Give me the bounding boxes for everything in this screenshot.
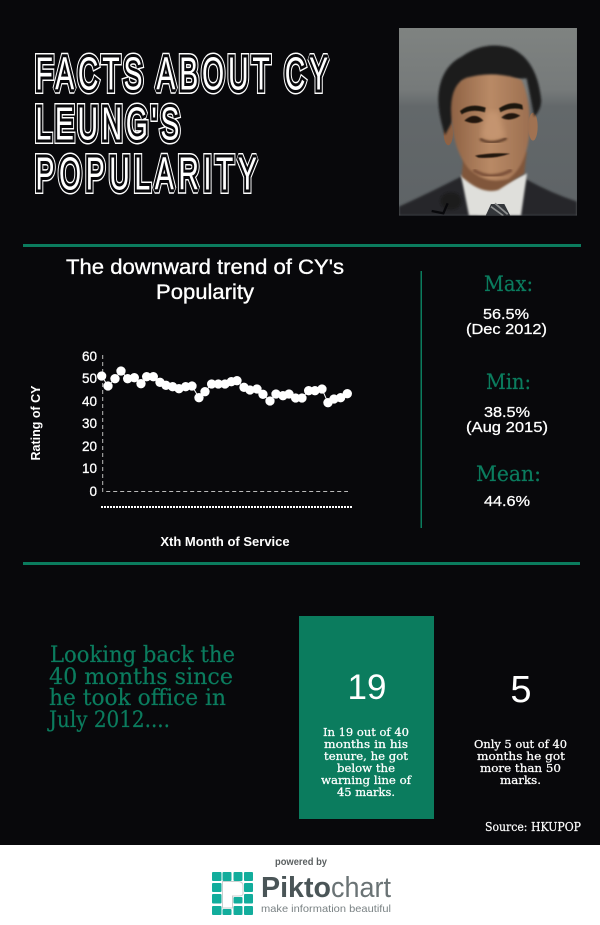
eyebrows [460, 103, 523, 114]
panel: 5 months [474, 669, 567, 787]
y axis: 0 [89, 484, 97, 499]
stat: min: (Aug 2015) [466, 420, 548, 436]
divider bottom [23, 562, 580, 565]
stat: mean [476, 462, 541, 510]
chart heading [66, 256, 344, 304]
y axis [82, 349, 97, 499]
mouth [475, 153, 510, 158]
title: POPULARITY [36, 149, 261, 200]
wordmark: Pikto [261, 872, 331, 904]
chart heading: The downward trend of CY's [66, 256, 344, 279]
intro text: July 2012.... [47, 708, 170, 733]
portrait photo [399, 28, 577, 216]
chin shadow [473, 170, 512, 176]
title: FACTS ABOUT CY [36, 49, 332, 100]
intro text: 40 months since [49, 665, 233, 690]
title [36, 49, 332, 200]
data points [97, 366, 352, 407]
y axis title: Rating of CY [29, 385, 43, 460]
stat: mean: 44.6% [484, 494, 530, 510]
stat: min: 38.5% [484, 405, 530, 421]
panel: 19 months: warning line of [321, 773, 412, 787]
title: POPULARITY [36, 149, 261, 200]
divider top [23, 244, 581, 247]
panel: 19 months: 45 marks. [337, 785, 395, 799]
nose [482, 112, 505, 142]
microphone [440, 192, 462, 210]
intro text: Looking back the [50, 643, 235, 668]
vertical divider [420, 271, 422, 528]
powered by: powered by [275, 857, 327, 868]
stat: max: (Dec 2012) [466, 322, 547, 338]
panel: 5 months: marks. [500, 773, 541, 787]
wordmark [261, 872, 391, 904]
y axis: 30 [82, 416, 97, 431]
stat: min [466, 370, 548, 436]
y axis: 20 [82, 439, 97, 454]
panel: 5 months: 5 [510, 669, 532, 711]
panel: 19 months: below the [337, 761, 395, 775]
stat: max [466, 272, 547, 338]
y axis: 40 [82, 394, 97, 409]
title: LEUNG'S [36, 99, 183, 150]
panel: 5 months: months he got [477, 749, 565, 763]
title: POPULARITY [36, 149, 261, 200]
title: FACTS ABOUT CY [36, 49, 332, 100]
wordmark: chart [331, 872, 391, 904]
face [451, 74, 530, 181]
panel: 19 months: In 19 out of 40 [323, 725, 409, 739]
eyes [464, 113, 520, 123]
suit [399, 177, 577, 216]
panel: 19 months: months in his [324, 737, 408, 751]
title: LEUNG'S [36, 99, 183, 150]
hair [438, 46, 541, 135]
stat: min: Min: [486, 370, 531, 394]
panel: 5 months: more than 50 [480, 761, 561, 775]
stat: max: 56.5% [483, 307, 529, 323]
title: LEUNG'S [36, 99, 183, 150]
chart heading: Popularity [156, 281, 255, 304]
footer [0, 845, 600, 925]
neck [462, 152, 527, 191]
icon: piktochart logo [212, 872, 253, 915]
panel: 19 months [299, 616, 434, 819]
panel: 19 months: 19 [348, 668, 386, 707]
source note: Source: HKUPOP [485, 820, 581, 834]
y axis: 10 [82, 461, 97, 476]
panel: 5 months: Only 5 out of 40 [474, 737, 567, 751]
intro text: he took office in [49, 686, 226, 711]
tagline: make information beautiful [261, 903, 391, 915]
title: FACTS ABOUT CY [36, 49, 332, 100]
stat: mean: Mean: [476, 462, 541, 486]
y axis: 60 [82, 349, 97, 364]
intro text [47, 643, 235, 733]
stat: max: Max: [484, 272, 533, 296]
shirt [461, 173, 527, 216]
x axis title: Xth Month of Service [160, 534, 290, 549]
ears [444, 121, 453, 145]
line chart [29, 349, 353, 549]
y axis: 50 [82, 371, 97, 386]
tie [486, 204, 510, 216]
panel: 19 months: tenure, he got [324, 749, 408, 763]
